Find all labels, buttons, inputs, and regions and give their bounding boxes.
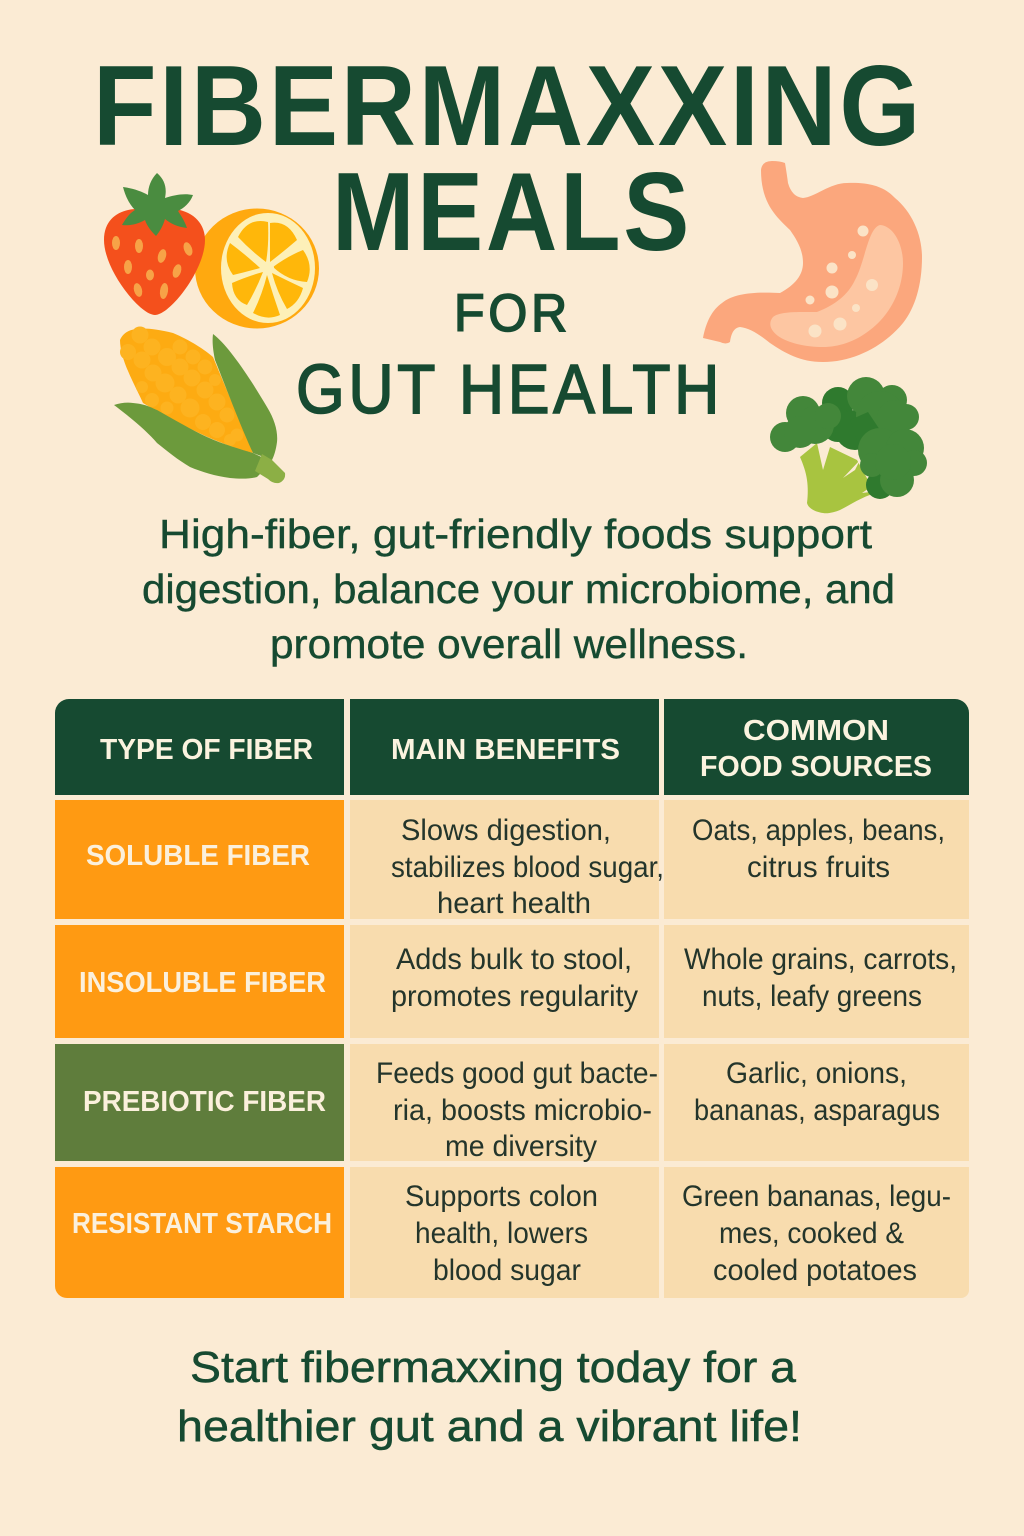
- closing message: Start fibermaxxing today for a: [190, 1343, 797, 1392]
- table header: [55, 699, 969, 795]
- row: soluble fiber: SOLUBLE FIBER: [86, 840, 310, 872]
- table header: MAIN BENEFITS: [391, 734, 620, 766]
- row: resistant starch: blood sugar: [433, 1254, 581, 1287]
- table header: COMMON: [743, 715, 889, 747]
- row: resistant starch: cooled potatoes: [713, 1254, 917, 1287]
- row: resistant starch: RESISTANT STARCH: [72, 1208, 332, 1240]
- row: soluble fiber: Oats, apples, beans,: [692, 814, 945, 847]
- icon: corn: [114, 326, 285, 483]
- intro text: High-fiber, gut-friendly foods support: [159, 511, 873, 557]
- row: soluble fiber: heart health: [437, 887, 591, 920]
- icon: strawberry: [104, 173, 205, 315]
- table header: TYPE OF FIBER: [100, 734, 313, 766]
- icon: broccoli: [770, 377, 927, 513]
- row: resistant starch: Green bananas, legu-: [682, 1180, 951, 1213]
- row: prebiotic fiber: ria, boosts microbio-: [393, 1094, 652, 1127]
- table header: FOOD SOURCES: [700, 751, 932, 783]
- row: insoluble fiber: nuts, leafy greens: [702, 980, 922, 1013]
- intro text: promote overall wellness.: [270, 621, 748, 667]
- icon: stomach: [703, 161, 922, 362]
- title: [93, 43, 923, 428]
- row: prebiotic fiber: [55, 1044, 969, 1163]
- row: soluble fiber: [55, 800, 969, 920]
- intro text: [142, 511, 895, 667]
- title: FOR: [454, 284, 571, 343]
- row: resistant starch: health, lowers: [415, 1217, 588, 1250]
- row: prebiotic fiber: PREBIOTIC FIBER: [83, 1086, 326, 1118]
- row: prebiotic fiber: bananas, asparagus: [694, 1094, 940, 1127]
- row: resistant starch: [55, 1167, 969, 1298]
- intro text: digestion, balance your microbiome, and: [142, 566, 895, 612]
- title: MEALS: [332, 150, 692, 274]
- closing message: healthier gut and a vibrant life!: [177, 1402, 802, 1451]
- row: prebiotic fiber: Feeds good gut bacte-: [376, 1057, 658, 1090]
- row: prebiotic fiber: Garlic, onions,: [726, 1057, 907, 1090]
- row: soluble fiber: citrus fruits: [747, 851, 890, 884]
- row: prebiotic fiber: me diversity: [445, 1130, 597, 1163]
- row: insoluble fiber: [55, 925, 969, 1038]
- row: soluble fiber: Slows digestion,: [401, 814, 611, 847]
- icon: orange: [195, 208, 319, 328]
- closing message: [177, 1343, 802, 1451]
- row: insoluble fiber: Adds bulk to stool,: [396, 943, 632, 976]
- row: insoluble fiber: promotes regularity: [391, 980, 638, 1013]
- row: insoluble fiber: INSOLUBLE FIBER: [79, 967, 326, 999]
- title: GUT HEALTH: [296, 350, 723, 428]
- title: FIBERMAXXING: [93, 43, 923, 170]
- row: soluble fiber: stabilizes blood sugar,: [391, 851, 664, 884]
- row: resistant starch: Supports colon: [405, 1180, 598, 1213]
- row: insoluble fiber: Whole grains, carrots,: [684, 943, 957, 976]
- fiber table: [55, 699, 969, 1298]
- row: resistant starch: mes, cooked &: [719, 1217, 904, 1250]
